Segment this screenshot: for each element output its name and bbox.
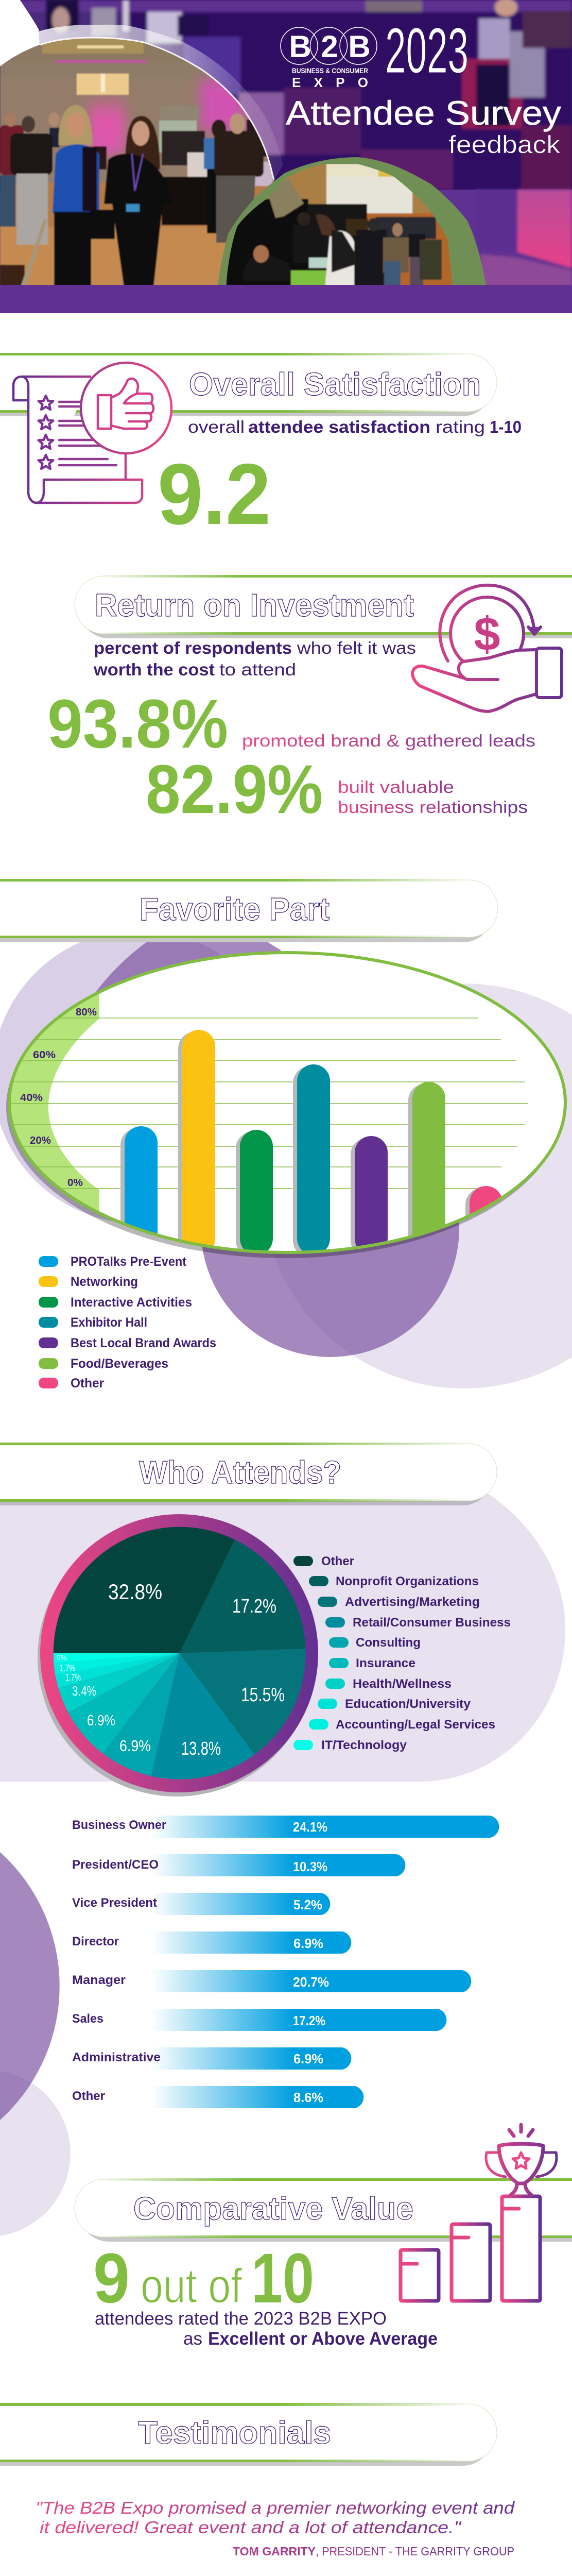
section: testimonials [0, 2403, 541, 2576]
legend: industries: Accounting/Legal Services [336, 1718, 495, 1732]
heading pill: Who Attends: Who Attends? [139, 1455, 341, 1490]
legend: industries: Advertising/Marketing [345, 1595, 480, 1609]
bar: Director 6.9% [72, 1931, 351, 1954]
bar: Vice President 5.2%: Vice President [72, 1896, 157, 1910]
y axis labels: 40% [20, 1092, 43, 1104]
text: percent of respondents: to attend [219, 660, 296, 679]
bar: President/CEO 10.3% [72, 1854, 405, 1876]
text: satisfaction rating description: attendee satisfaction [248, 417, 430, 436]
icon: podium bars with trophy [401, 2125, 557, 2301]
bar: Business Owner 24.1%: Business Owner [72, 1818, 166, 1832]
text: promoted brand and gathered leads: promoted brand & gathered leads [242, 731, 535, 750]
text: satisfaction rating description: 1-10 [490, 417, 522, 436]
legend: favorite part: Networking [71, 1275, 138, 1289]
section: comparative value [75, 2125, 572, 2349]
testimonial: Tom Garrity: TOM GARRITY [233, 2545, 316, 2558]
lavender panel [0, 1493, 565, 1782]
logo: B2B Business & Consumer Expo: B [289, 29, 311, 64]
text: attendees rated: Excellent or Above Average [208, 2329, 438, 2349]
bar: President/CEO 10.3%: President/CEO [72, 1858, 159, 1872]
heading pill: Overall Satisfaction: Overall Satisfaction [189, 367, 481, 402]
legend: favorite part: PROTalks Pre-Event [71, 1255, 187, 1269]
heading pill: Return on Investment [75, 575, 572, 638]
bar: Manager 20.7% [72, 1970, 471, 1992]
icon: hand holding coin [412, 585, 562, 711]
background circles [0, 930, 572, 1388]
text: percent of respondents: worth the cost [93, 660, 215, 679]
bar: Exhibitor Hall [293, 1064, 330, 1257]
y axis labels [20, 1007, 97, 1189]
text: percent of respondents: who felt it was [297, 638, 416, 657]
testimonial: Tom Garrity: , PRESIDENT - THE GARRITY GROUP [316, 2545, 514, 2558]
pie value labels: 17.2% [232, 1596, 276, 1617]
text: built valuable business relationships: built valuable [338, 777, 454, 796]
icon: review scroll with thumbs up [13, 363, 171, 503]
text: built valuable business relationships: business relationships [338, 798, 528, 817]
heading pill: Testimonials [0, 2403, 497, 2466]
hero background photo [0, 0, 572, 289]
pie value labels [57, 1580, 285, 1759]
heading pill: Comparative Value [75, 2178, 572, 2242]
translucent arch band [39, 25, 283, 180]
logo: B2B Business & Consumer Expo: 2 [321, 29, 338, 64]
legend: favorite part: Food/Beverages [71, 1357, 168, 1371]
y axis labels: 60% [33, 1049, 56, 1061]
legend: favorite part [39, 1255, 216, 1391]
slice: Advertising 15.5% [180, 1649, 306, 1755]
text: attendees rated: as [183, 2329, 202, 2349]
bar: Sales 17.2% [72, 2009, 446, 2031]
heading pill: Testimonials: Testimonials [138, 2415, 331, 2451]
year 2023: 2023 [385, 15, 469, 87]
bar: Director 6.9%: 6.9% [293, 1936, 323, 1951]
pie value labels: 13.8% [181, 1738, 221, 1759]
bar: Administrative 6.9%: 6.9% [293, 2051, 323, 2066]
bar: Sales 17.2%: 17.2% [293, 2013, 325, 2028]
stat: 9.2: 9.2 [158, 446, 271, 543]
legend: industries: Education/University [345, 1697, 471, 1711]
slice: Consulting 6.9% [103, 1653, 180, 1776]
stat: 93.8%: 93.8% [47, 686, 228, 762]
bar: Other 8.6%: 8.6% [293, 2090, 323, 2105]
pie value labels: 6.9% [87, 1713, 115, 1729]
purple band under hero [0, 285, 572, 313]
heading pill: Comparative Value: Comparative Value [133, 2191, 413, 2227]
slice: Nonprofit 17.2% [180, 1539, 306, 1653]
hero banner [0, 0, 572, 313]
bar: Business Owner 24.1%: 24.1% [293, 1819, 327, 1835]
arch edge line [40, 38, 274, 180]
heading pill: Favorite Part [0, 879, 498, 942]
heading pill: Overall Satisfaction [0, 353, 497, 416]
pie value labels: 15.5% [241, 1684, 285, 1706]
text: percent of respondents: percent of respondents [94, 638, 292, 657]
slice: Insurance 6.9% [68, 1653, 180, 1753]
photo: exhibitor hall [226, 164, 452, 285]
text: attendees rated [95, 2309, 438, 2349]
pie value labels: 6.9% [119, 1737, 151, 1755]
legend: industries [293, 1554, 511, 1752]
testimonial: Tom Garrity: it delivered! Great event and a lot of attendance." [40, 2518, 461, 2537]
bar: Other 8.6% [72, 2086, 363, 2108]
white corner shape [0, 0, 40, 66]
logo: B2B Business & Consumer Expo: B [348, 29, 371, 64]
legend: industries: Insurance [356, 1656, 415, 1670]
slice: Other 32.8% [54, 1527, 235, 1653]
stat: 9 out of 10: 10 [251, 2239, 314, 2318]
bar: Business Owner 24.1% [72, 1816, 499, 1838]
bar: Administrative 6.9%: Administrative [72, 2050, 161, 2064]
bar: Networking [178, 1030, 215, 1257]
bar: Interactive Activities [236, 1130, 273, 1257]
stat: 9 out of 10: 9 [93, 2239, 130, 2318]
heading pill: Who Attends [0, 1443, 497, 1505]
text: attendees rated: attendees rated the 2023 B2B EXPO [95, 2309, 387, 2329]
bar: Vice President 5.2% [72, 1893, 330, 1915]
bar: Other 8.6%: Other [72, 2089, 105, 2103]
section: return on investment [47, 575, 572, 828]
legend: favorite part: Exhibitor Hall [71, 1315, 147, 1330]
bar: Administrative 6.9% [72, 2047, 351, 2070]
pie chart: industries [38, 1514, 318, 1797]
bar: PROTalks Pre-Event [120, 1126, 158, 1233]
text: satisfaction rating description: overall [188, 417, 245, 436]
legend: favorite part: Interactive Activities [71, 1295, 192, 1310]
legend: industries: Other [321, 1554, 354, 1568]
section: who attends [0, 1443, 565, 1797]
bar: Sales 17.2%: Sales [72, 2012, 103, 2026]
bar chart: favorite part [6, 953, 565, 1258]
text: satisfaction rating description [188, 417, 522, 436]
legend: industries: Health/Wellness [353, 1677, 452, 1691]
bar: Manager 20.7%: 20.7% [293, 1974, 329, 1990]
stat: 9 out of 10: out of [141, 2259, 242, 2313]
title: Attendee Survey: Attendee Survey [286, 94, 561, 132]
pie value labels: 1.7% [65, 1672, 81, 1683]
subtitle: feedback: feedback [448, 131, 561, 159]
pie value labels: 3.4% [72, 1683, 96, 1699]
slice: IT 0% [54, 1653, 180, 1663]
bar: Vice President 5.2%: 5.2% [293, 1897, 322, 1912]
photo: attendees in ballroom [0, 38, 274, 285]
heading pill: Return on Investment: Return on Investment [95, 588, 414, 623]
icon: dollar sign: $ [474, 608, 500, 660]
legend: favorite part: Best Local Brand Awards [71, 1336, 216, 1350]
slice: Retail 13.8% [151, 1653, 254, 1780]
section: favorite part [0, 879, 572, 1391]
bar: Manager 20.7%: Manager [72, 1973, 126, 1987]
legend: industries: Nonprofit Organizations [336, 1574, 479, 1588]
pie value labels: 0% [57, 1653, 67, 1662]
slice: Accounting 1.7% [54, 1653, 180, 1675]
stat: 9 out of 10 [93, 2239, 314, 2318]
logo: B2B Business & Consumer Expo: EXPO [292, 75, 368, 90]
bar: Other [465, 1186, 501, 1216]
bar: Director 6.9%: Director [72, 1935, 119, 1948]
bar: Best Local Brand Awards [351, 1136, 388, 1257]
pie value labels: 1.7% [60, 1663, 75, 1673]
legend: industries: Consulting [356, 1636, 421, 1650]
pie value labels: 32.8% [108, 1580, 162, 1604]
legend: favorite part: Other [71, 1376, 104, 1391]
decorative left circles [0, 1852, 71, 2236]
green arch frame [218, 157, 486, 285]
text: built valuable business relationships [338, 777, 528, 817]
testimonial: Tom Garrity: "The B2B Expo promised a premier networking event and [36, 2498, 515, 2517]
heading pill: Favorite Part: Favorite Part [140, 892, 330, 927]
logo: B2B Business & Consumer Expo [281, 27, 377, 90]
stat: 82.9%: 82.9% [146, 751, 323, 828]
text: percent of respondents [93, 638, 416, 679]
chart: job titles [72, 1816, 499, 2108]
y axis labels: 80% [76, 1007, 97, 1018]
slice: Health 3.4% [58, 1653, 180, 1713]
legend: industries: Retail/Consumer Business [353, 1616, 511, 1630]
bar: President/CEO 10.3%: 10.3% [293, 1859, 327, 1874]
logo: B2B Business & Consumer Expo: BUSINESS & CONSUMER [292, 66, 368, 75]
legend: industries: IT/Technology [321, 1738, 407, 1752]
y axis labels: 0% [67, 1177, 83, 1189]
text: satisfaction rating description: rating [436, 417, 485, 436]
bar: Food and Beverages [408, 1082, 445, 1236]
y axis labels: 20% [30, 1135, 51, 1146]
section: overall satisfaction [0, 353, 522, 543]
testimonial: Tom Garrity [36, 2498, 515, 2558]
slice: Education 1.7% [55, 1653, 180, 1688]
